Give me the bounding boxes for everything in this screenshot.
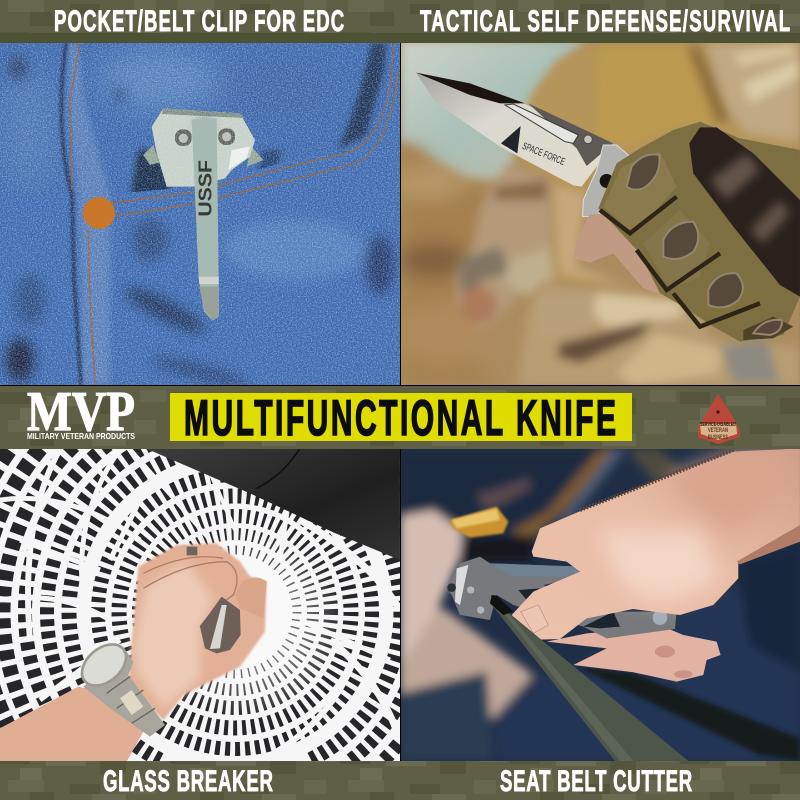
forearm xyxy=(0,687,143,762)
panel: glass breaker xyxy=(0,449,400,761)
ring xyxy=(187,547,197,555)
shattered glass radial fractures xyxy=(0,449,400,761)
glove strap lines xyxy=(600,197,760,327)
USSF engraving: USSF xyxy=(195,160,216,217)
thumb xyxy=(573,213,667,297)
copper rivet xyxy=(83,197,115,229)
veteran business badge: VETERAN xyxy=(708,428,728,434)
main hand and arm xyxy=(512,448,800,640)
folding knife body xyxy=(143,108,263,187)
black belt xyxy=(577,667,800,761)
top camouflage band with captions xyxy=(0,0,800,43)
caption: seat belt cutter: SEAT BELT CUTTER xyxy=(500,765,692,798)
wristwatch xyxy=(83,652,165,737)
irregular white cracks xyxy=(0,449,400,761)
blurred car background xyxy=(400,448,800,761)
veteran business badge: BUSINESS xyxy=(708,435,728,441)
pocket front denim xyxy=(126,163,382,368)
arm hair xyxy=(580,450,733,510)
pocket crescent shadow xyxy=(338,43,386,150)
knife handle xyxy=(583,145,628,217)
grey seat belt strap xyxy=(491,603,688,761)
pocket stitching xyxy=(70,43,398,385)
title banner: MULTIFUNCTIONAL KNIFE xyxy=(184,390,616,446)
belt clip xyxy=(192,118,219,321)
lower camouflage trousers xyxy=(517,283,800,387)
thumbnail xyxy=(521,605,548,633)
pocket opening shadow xyxy=(130,150,170,200)
bottom camouflage band with captions xyxy=(0,761,800,800)
space force logo xyxy=(501,126,521,153)
knife in fist xyxy=(200,597,241,653)
caption: tactical: TACTICAL SELF DEFENSE/SURVIVAL xyxy=(420,5,790,38)
panel: seat belt cutter xyxy=(400,445,800,761)
impact glow xyxy=(194,535,338,714)
veteran business badge: SERVICE-DISABLED xyxy=(700,422,736,428)
desert ground xyxy=(401,134,488,385)
hard knuckle plate xyxy=(689,127,800,297)
sky xyxy=(400,40,587,180)
palm fingers xyxy=(547,627,721,682)
caption: glass breaker: GLASS BREAKER xyxy=(103,765,273,798)
soldier shirt xyxy=(517,43,800,293)
thumb xyxy=(235,577,267,618)
blade engraving: SPACE FORCE xyxy=(521,141,567,168)
veteran business badge xyxy=(698,394,740,444)
glove xyxy=(598,122,800,342)
knife blade xyxy=(416,73,613,187)
denim shading xyxy=(0,44,224,184)
car dashboard xyxy=(143,448,400,560)
middle camouflage band xyxy=(0,381,800,449)
front seam: light strip and dark fold xyxy=(68,43,110,385)
denim weave texture xyxy=(0,43,400,385)
fist xyxy=(128,543,267,720)
blurred arm xyxy=(457,163,553,330)
panel: denim pocket with clip xyxy=(0,43,400,393)
gold ring xyxy=(450,507,508,538)
caption: pocket clip: POCKET/BELT CLIP FOR EDC xyxy=(54,5,344,38)
cutter knife xyxy=(447,557,677,638)
MVP logo: MILITARY VETERAN PRODUCTS xyxy=(27,431,135,441)
MVP logo: MVP xyxy=(27,381,135,443)
panel: gloved hand with tactical knife xyxy=(390,40,800,387)
finger guards xyxy=(627,154,782,335)
denim dark creases xyxy=(6,56,394,393)
